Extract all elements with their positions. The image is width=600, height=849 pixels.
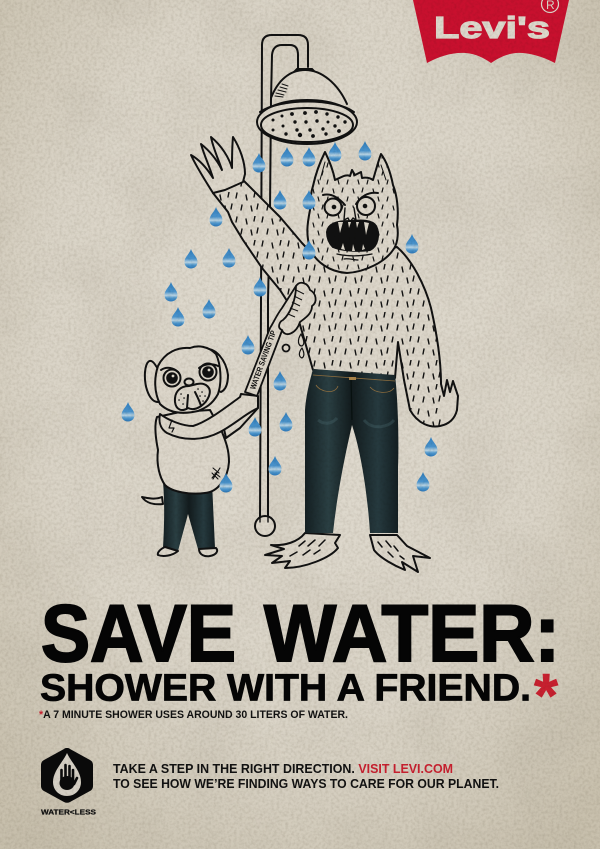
illustration: shower pipe and head [255, 35, 357, 536]
subheadline [40, 662, 559, 731]
toothbrush [245, 283, 316, 396]
icon: water less logo: WATER<LESS [41, 808, 96, 816]
call to action: TAKE A STEP IN THE RIGHT DIRECTION. VISIT LEVI.COM [113, 761, 453, 776]
subheadline: SHOWER WITH A FRIEND. [40, 668, 531, 710]
dog tail [142, 497, 163, 504]
call to action: TO SEE HOW WE’RE FINDING WAYS TO CARE FOR OUR PLANET. [113, 776, 499, 791]
monster mouth [327, 221, 378, 260]
dog patch [212, 468, 220, 479]
monster jeans [305, 369, 398, 533]
monster feet [265, 533, 430, 572]
dog near arm [159, 394, 258, 439]
headline: SAVE [41, 589, 236, 679]
headline [41, 589, 560, 679]
monster head [307, 152, 398, 273]
toothbrush label: WATER SAVING TIP [248, 329, 278, 391]
dog ears and head [145, 346, 228, 413]
Levi's batwing logo [413, 0, 569, 63]
soap foam [279, 283, 316, 358]
monster body and arms [213, 180, 458, 426]
monster eyes [323, 193, 378, 222]
illustration: dog [142, 346, 258, 556]
call to action [113, 761, 499, 791]
dog paws [158, 547, 217, 556]
dog body [155, 410, 229, 494]
icon: water less logo [41, 748, 96, 816]
dog jeans [163, 482, 215, 551]
monster raised hand [191, 137, 245, 193]
illustration: monster [191, 137, 458, 572]
Levi's batwing logo: Levi's [434, 10, 550, 45]
footnote: *A 7 MINUTE SHOWER USES AROUND 30 LITERS OF WATER. [39, 709, 348, 721]
red asterisk: * [534, 662, 559, 731]
dog far arm [222, 398, 258, 438]
dog face [161, 364, 218, 410]
water drops [122, 141, 438, 492]
headline: WATER: [264, 589, 560, 679]
illustration: shower head holes [272, 110, 347, 138]
